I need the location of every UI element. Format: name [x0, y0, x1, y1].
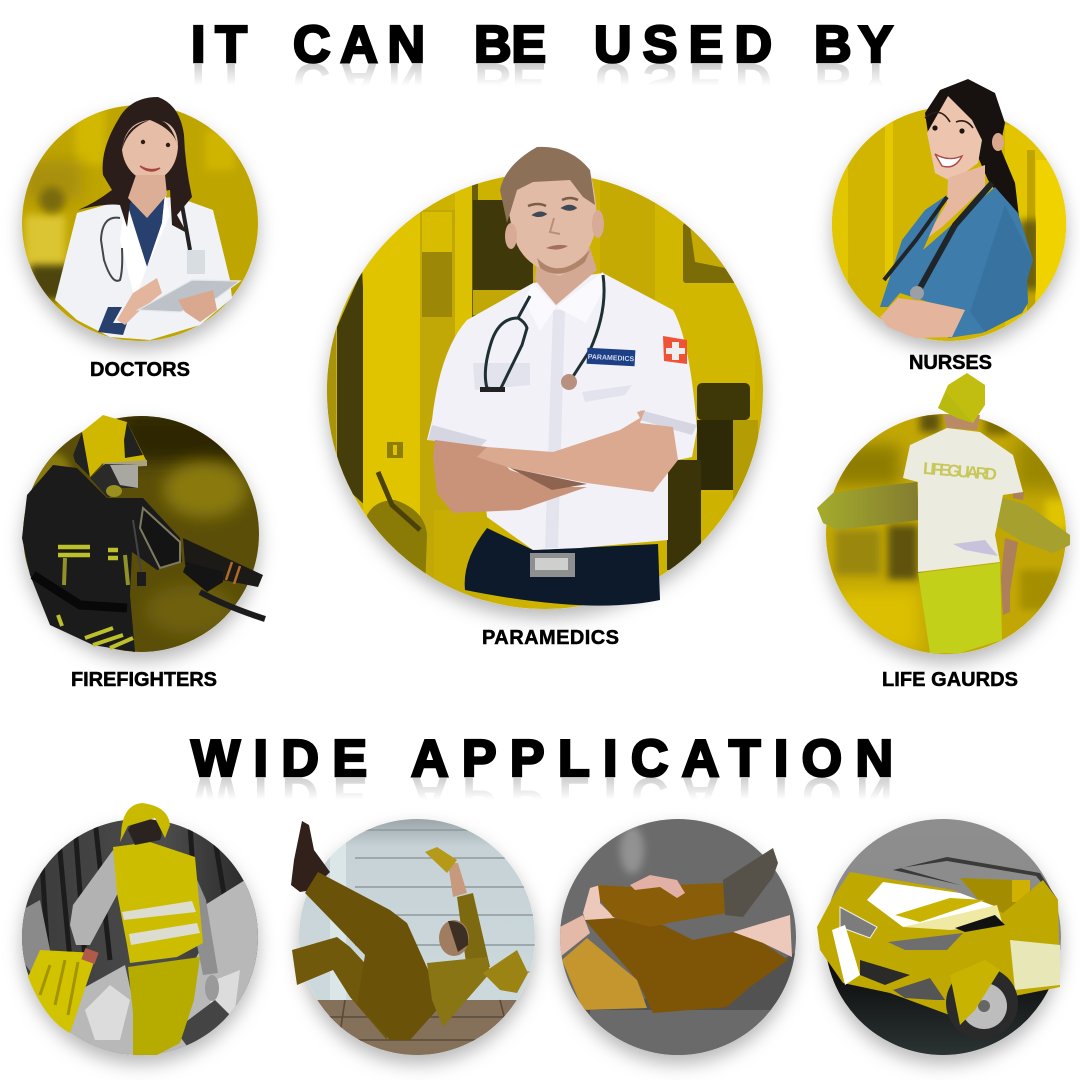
rescue worker figure [28, 803, 219, 1055]
title: it can be used by: IT [191, 52, 247, 110]
surfboard [817, 482, 1070, 553]
nurse figure [880, 79, 1033, 338]
title: it can be used by: BY [814, 52, 893, 110]
panel: life guards [817, 373, 1070, 656]
head [507, 172, 596, 276]
crossed arms [433, 440, 587, 513]
panel: nurses [830, 79, 1070, 345]
lifeguard figure [903, 373, 1024, 653]
navy trousers [465, 528, 660, 606]
lifeguard figure: LIFEGUARD [922, 459, 998, 484]
panel: car crash [817, 818, 1063, 1058]
firefighter figure [22, 415, 265, 652]
title: wide application [191, 730, 893, 824]
title: wide application: WIDE [191, 730, 367, 788]
label: firefighters: FIREFIGHTERS [71, 669, 217, 691]
label: doctors: DOCTORS [90, 359, 190, 381]
paramedic figure [427, 147, 697, 606]
panel: doctors [20, 97, 260, 350]
name patch: paramedics: PARAMEDICS [587, 354, 635, 363]
doctor figure [55, 97, 240, 340]
title: it can be used by: IT [191, 16, 247, 74]
falling man figure [291, 821, 528, 1040]
title: it can be used by [191, 16, 893, 110]
title: wide application: APPLICATION [411, 730, 893, 788]
title: it can be used by: CAN [293, 16, 425, 74]
title: wide application: APPLICATION [411, 766, 893, 824]
football boot [723, 848, 778, 917]
wrecked car [817, 857, 1060, 1039]
panel: paramedics [320, 147, 770, 610]
title: it can be used by: USED [594, 16, 772, 74]
white shirt [427, 273, 697, 550]
hair [500, 147, 595, 223]
panel: leg injury [558, 818, 800, 1060]
neck [535, 248, 597, 305]
collar [524, 272, 606, 331]
label: life gaurds: LIFE GAURDS [882, 669, 1018, 691]
panel: firefighters [20, 412, 265, 656]
label: nurses: NURSES [909, 352, 992, 374]
title: it can be used by: BE [474, 52, 546, 110]
panel: fall accident [291, 818, 540, 1060]
title: it can be used by: USED [594, 52, 772, 110]
belt buckle [530, 553, 575, 577]
swiss cross arm badge [663, 336, 687, 364]
stethoscope [485, 275, 604, 390]
name patch: paramedics [587, 348, 635, 366]
title: it can be used by: CAN [293, 52, 425, 110]
title: it can be used by: BY [814, 16, 893, 74]
label: paramedics: PARAMEDICS [482, 627, 619, 649]
hand on shin [630, 875, 685, 898]
title: wide application: WIDE [191, 766, 367, 824]
title: it can be used by: BE [474, 16, 546, 74]
panel: rescue worker [20, 803, 262, 1060]
